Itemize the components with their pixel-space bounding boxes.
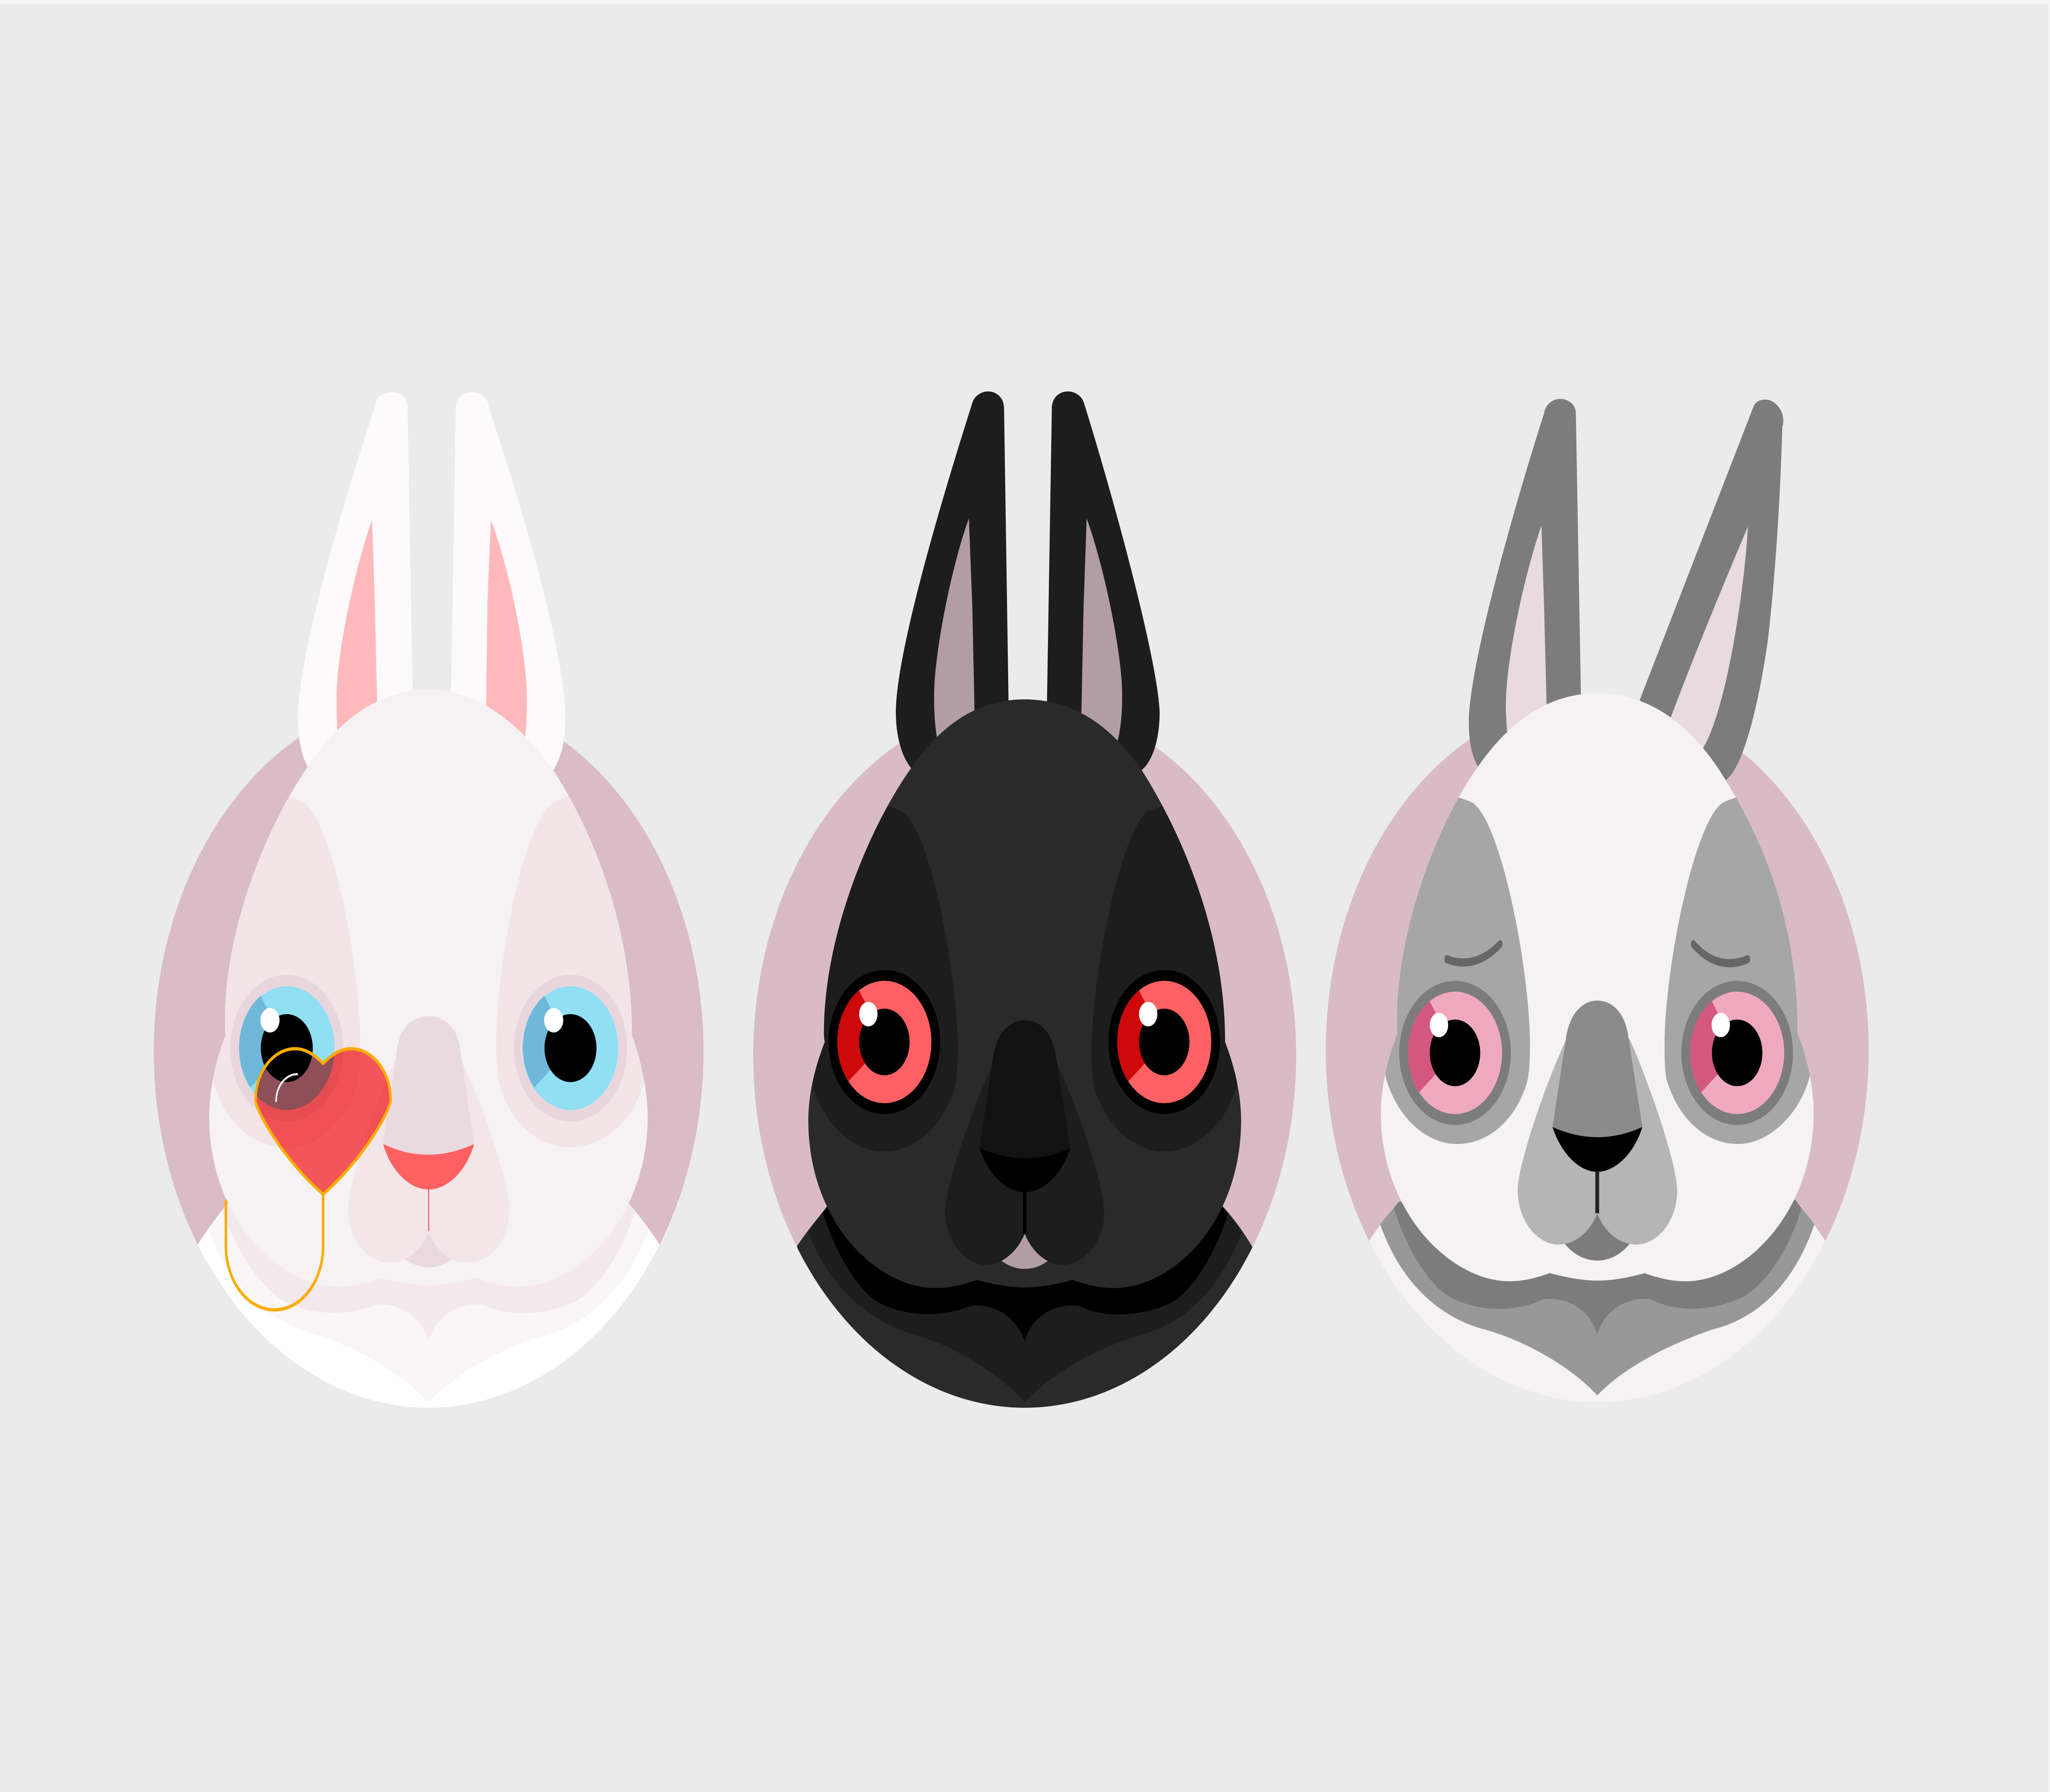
philtrum line xyxy=(428,1189,429,1231)
left inner ear xyxy=(1506,525,1547,740)
left ear xyxy=(1469,399,1581,767)
head xyxy=(1381,693,1814,1281)
heart shine xyxy=(276,1074,297,1101)
philtrum line xyxy=(1023,1191,1026,1234)
right inner ear xyxy=(486,520,527,743)
head xyxy=(808,699,1241,1288)
backdrop disc xyxy=(753,704,1296,1408)
left inner ear xyxy=(934,519,975,743)
rabbit: grey and white xyxy=(1326,399,1869,1457)
heart outline xyxy=(255,1049,391,1194)
left eye xyxy=(230,975,343,1122)
right ear xyxy=(451,392,565,770)
chest and neck fur xyxy=(1369,1200,1825,1402)
chin xyxy=(400,1232,457,1267)
eye patches xyxy=(812,806,1237,1151)
chin xyxy=(996,1234,1053,1269)
right inner ear xyxy=(1666,527,1748,753)
muzzle xyxy=(348,1059,509,1263)
nose bridge xyxy=(979,1020,1070,1158)
eye patches xyxy=(1359,777,1836,1144)
left eye xyxy=(829,970,940,1114)
left ear xyxy=(298,392,413,767)
backdrop disc xyxy=(1326,698,1869,1402)
right eye xyxy=(1108,970,1220,1114)
right ear xyxy=(1640,400,1784,780)
left inner ear xyxy=(337,520,377,740)
left ear xyxy=(896,392,1009,768)
right ear xyxy=(1047,392,1159,770)
eye patches xyxy=(213,796,644,1147)
left eye xyxy=(1399,981,1511,1125)
chest and neck fur xyxy=(198,1204,660,1408)
chin xyxy=(1561,1213,1633,1261)
stand loop xyxy=(226,1194,323,1310)
nose bridge xyxy=(1553,1000,1642,1137)
left brow xyxy=(1446,944,1500,963)
heart with stand xyxy=(226,1049,391,1310)
rabbit: white xyxy=(154,392,704,1457)
nose bridge xyxy=(383,1016,474,1154)
right inner ear xyxy=(1081,519,1122,746)
mouth xyxy=(1553,1127,1642,1172)
right eye xyxy=(1681,981,1793,1125)
head xyxy=(209,690,648,1287)
philtrum line xyxy=(1595,1171,1599,1213)
heart fill xyxy=(255,1049,391,1194)
right brow xyxy=(1693,944,1748,963)
muzzle xyxy=(1518,1038,1677,1245)
right eye xyxy=(514,975,627,1122)
mouth xyxy=(383,1144,474,1189)
backdrop disc xyxy=(154,695,704,1408)
mouth xyxy=(979,1148,1070,1192)
rabbit: black xyxy=(753,392,1296,1457)
chest and neck fur xyxy=(797,1206,1253,1408)
muzzle xyxy=(945,1062,1104,1265)
